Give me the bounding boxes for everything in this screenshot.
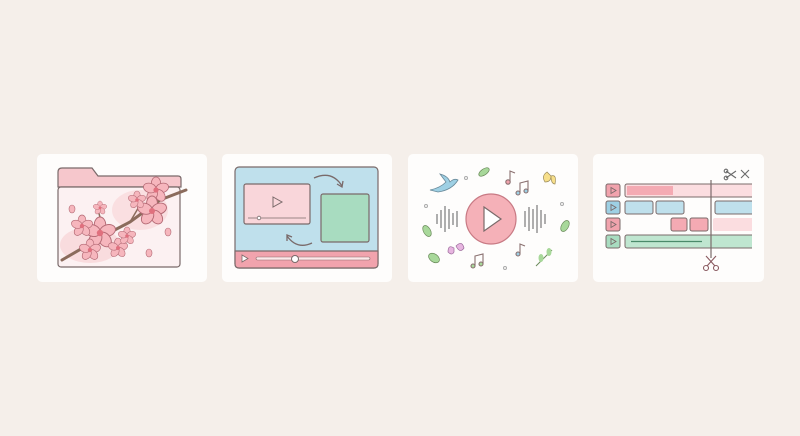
- panel: cherry blossom folder: [37, 154, 207, 282]
- cut line: [710, 180, 712, 258]
- icon: scissors bottom: [704, 256, 718, 270]
- panel: audio and nature: [408, 154, 578, 282]
- green box: [321, 194, 369, 242]
- screen: [235, 167, 378, 268]
- icon: play circle: [466, 194, 516, 244]
- icon: branch with blossoms: [62, 177, 186, 261]
- icon: folder: [58, 168, 181, 267]
- mini video: [244, 184, 310, 224]
- icons: scissors and close top: [724, 169, 749, 180]
- panel: video player swap: [222, 154, 392, 282]
- track icons: [606, 184, 620, 248]
- panel: timeline editor: [593, 154, 764, 282]
- track clips: [625, 184, 755, 248]
- arrows: [287, 175, 343, 245]
- icons: bird, leaves, notes, butterflies: [421, 166, 571, 270]
- control bar: [235, 251, 378, 268]
- sound waves: [437, 205, 545, 233]
